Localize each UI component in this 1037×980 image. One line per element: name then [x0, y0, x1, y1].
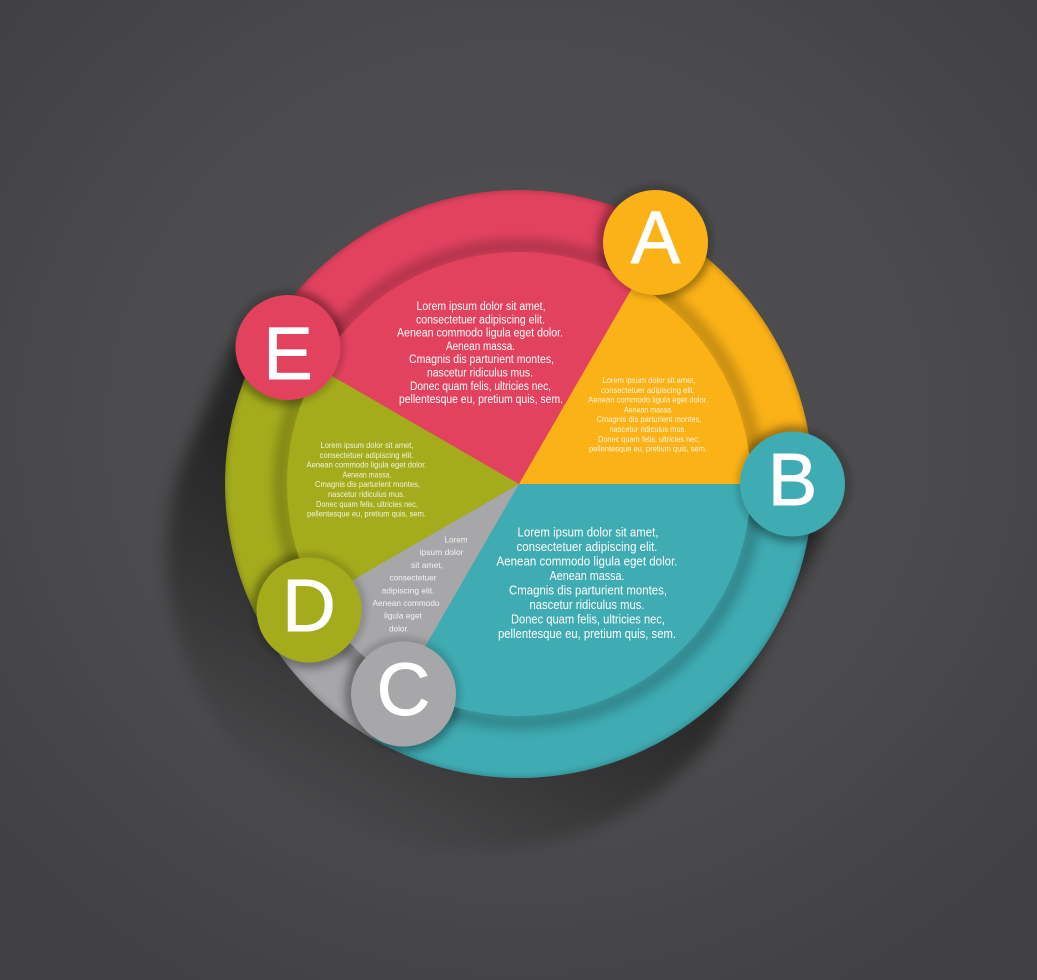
text: yellow wedge [588, 375, 708, 454]
circular diagram [222, 183, 852, 781]
text: gray wedge: ipsum dolor [420, 547, 464, 557]
text: red wedge: nascetur ridiculus mus. [427, 368, 533, 380]
badge B: B [768, 438, 817, 521]
text: gray wedge: dolor. [389, 623, 409, 633]
badge D [256, 558, 362, 662]
text: red wedge [397, 301, 563, 406]
badge halos [229, 183, 852, 752]
text: teal wedge [496, 526, 678, 641]
text: olive wedge: Aenean massa. [342, 469, 392, 479]
text: olive wedge: pellentesque eu, pretium quis, sem. [307, 509, 426, 519]
text: teal wedge: Aenean commodo ligula eget dolor. [496, 554, 678, 568]
text: red wedge: Cmagnis dis parturient montes, [409, 354, 554, 366]
text: yellow wedge: Donec quam felis, ultricies nec, [598, 434, 700, 444]
text: olive wedge: Lorem ipsum dolor sit amet, [320, 440, 414, 450]
text: gray wedge: Aenean commodo [372, 598, 440, 608]
text: teal wedge: Lorem ipsum dolor sit amet, [518, 526, 658, 540]
badge E: E [263, 312, 313, 395]
text: red wedge: Aenean massa. [446, 341, 515, 353]
long drop shadow [167, 345, 826, 851]
badge B [740, 432, 845, 536]
text: olive wedge: Donec quam felis, ultricies nec, [316, 499, 418, 509]
text: red wedge: pellentesque eu, pretium quis, sem. [399, 394, 563, 406]
text: teal wedge: pellentesque eu, pretium quis, sem. [498, 627, 676, 641]
text: olive wedge: Aenean commodo ligula eget dolor. [306, 460, 426, 470]
text: teal wedge: consectetuer adipiscing elit. [516, 540, 658, 554]
text: olive wedge: Cmagnis dis parturient montes, [315, 479, 420, 489]
text: gray wedge: adipiscing elit. [382, 585, 434, 595]
text: gray wedge: consectetuer [390, 573, 437, 583]
text: teal wedge: nascetur ridiculus mus. [530, 598, 644, 612]
text: yellow wedge: Aenean massa. [624, 404, 673, 414]
ring segment: gray [264, 484, 519, 739]
panel: gray wedge [318, 484, 519, 685]
ring segment: yellow [519, 229, 813, 484]
panel: red wedge [318, 252, 635, 484]
text: yellow wedge: nascetur ridiculus mus. [610, 424, 686, 434]
text: red wedge: consectetuer adipiscing elit. [416, 314, 545, 326]
badge D: D [282, 564, 336, 647]
badge A [603, 190, 708, 295]
text: yellow wedge: Cmagnis dis parturient montes, [596, 414, 702, 424]
text: red wedge: Donec quam felis, ultricies nec, [410, 381, 551, 393]
panel: olive wedge [287, 368, 519, 600]
text: red wedge: Lorem ipsum dolor sit amet, [416, 301, 546, 313]
text: yellow wedge: Aenean commodo ligula eget dolor. [588, 395, 708, 405]
badge C [351, 642, 456, 746]
ring segment: red [264, 190, 666, 484]
panel: teal wedge [403, 484, 751, 716]
text: teal wedge: Cmagnis dis parturient montes, [509, 584, 667, 598]
badge C: C [377, 648, 430, 731]
text: yellow wedge: consectetuer adipiscing elit. [601, 385, 695, 395]
text: yellow wedge: pellentesque eu, pretium quis, sem. [589, 444, 707, 454]
text: teal wedge: Donec quam felis, ultricies nec, [511, 612, 665, 626]
text: olive wedge: nascetur ridiculus mus. [328, 489, 405, 499]
text: red wedge: Aenean commodo ligula eget dolor. [397, 328, 563, 340]
panel: yellow wedge [519, 283, 751, 484]
text: gray wedge: sit amet, [411, 560, 443, 570]
text: teal wedge: Aenean massa. [550, 569, 624, 583]
ring segment: olive [225, 337, 519, 631]
outer ring [222, 183, 851, 781]
badge E [236, 295, 340, 400]
text: olive wedge: consectetuer adipiscing elit. [320, 450, 414, 460]
text: gray wedge: ligula eget [384, 611, 423, 621]
ring segment: teal [372, 484, 813, 778]
ring shading [222, 183, 851, 781]
badge A: A [631, 196, 681, 279]
text: gray wedge [372, 534, 468, 633]
text: olive wedge [306, 440, 426, 519]
text: yellow wedge: Lorem ipsum dolor sit amet, [602, 375, 696, 385]
text: gray wedge: Lorem [444, 534, 468, 544]
